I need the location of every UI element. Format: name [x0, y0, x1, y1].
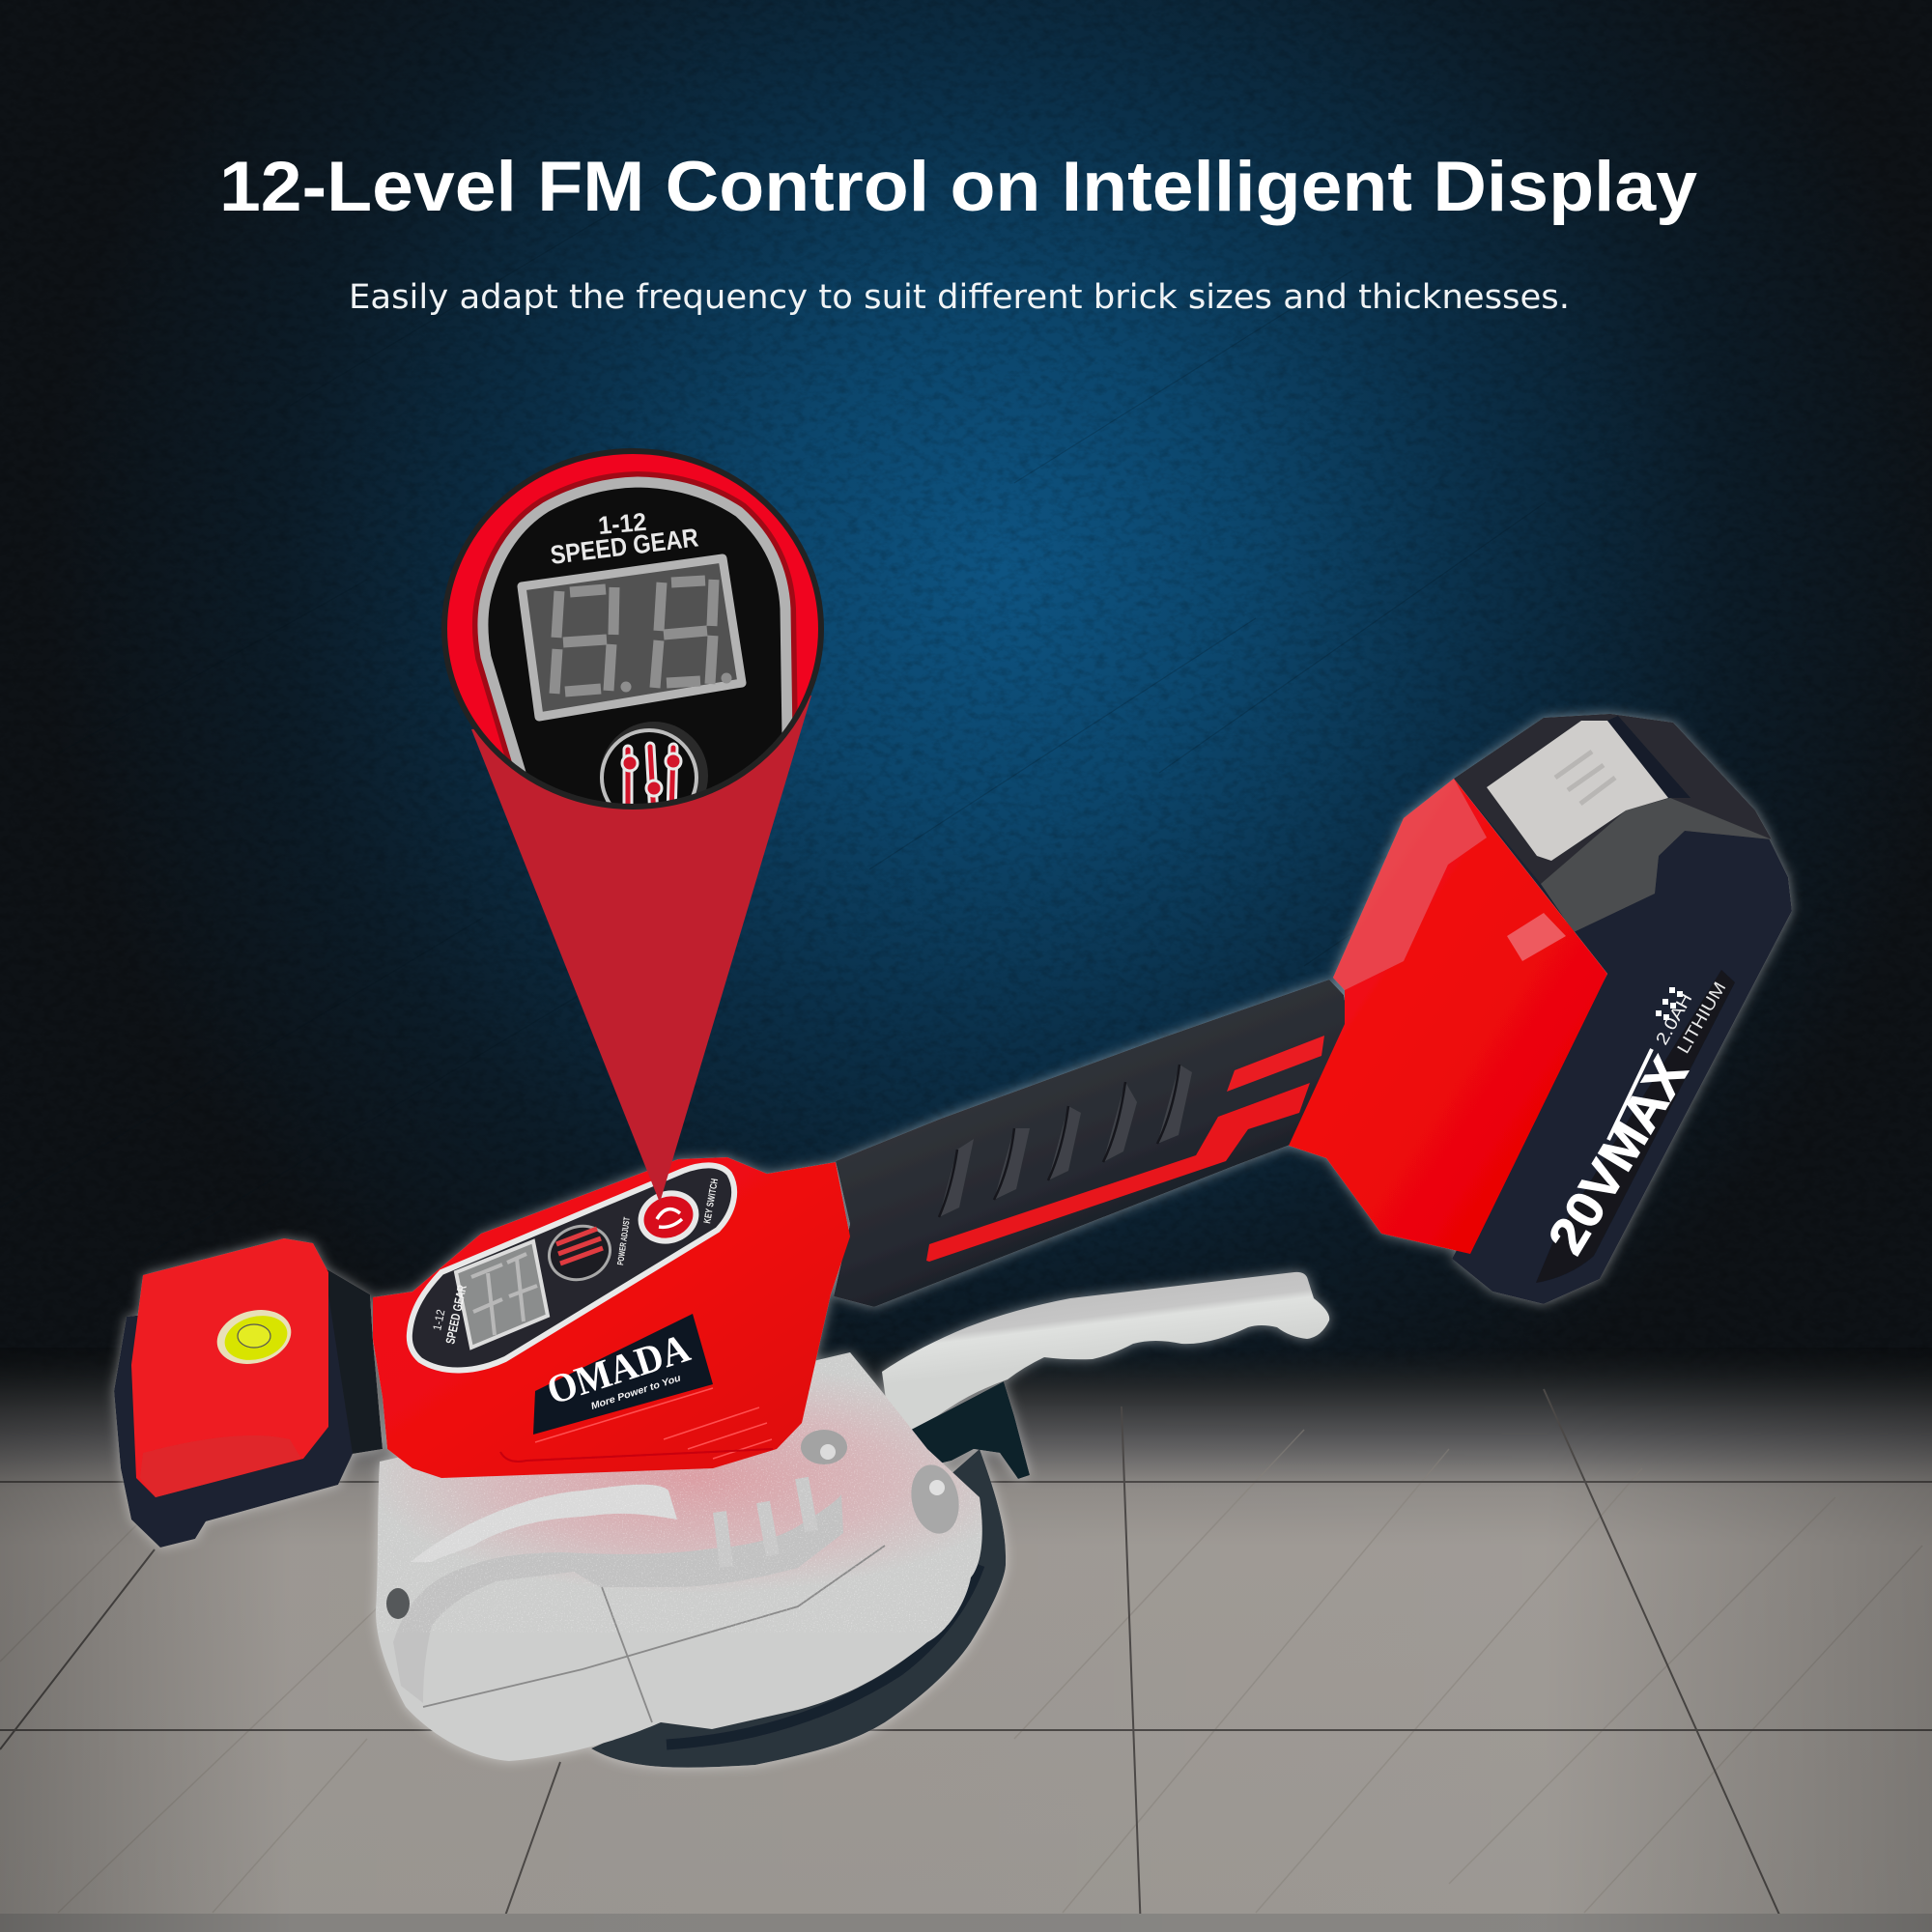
upper ridge [411, 1485, 677, 1562]
20V MAX text: 20VMAX [1538, 1047, 1699, 1264]
grip ridges [939, 1065, 1192, 1217]
lens label 1-12: 1-12 [597, 507, 647, 540]
handle grip [834, 980, 1350, 1307]
mounting screw [801, 1430, 847, 1464]
slider button icon [600, 722, 708, 804]
red strip upper [1227, 1036, 1324, 1092]
display digits [522, 558, 742, 717]
product: tile vibration tool [114, 714, 1792, 1768]
capacity bar [1608, 1049, 1652, 1140]
brand name: OMADA [542, 1326, 696, 1414]
panel label speed gear: SPEED GEAR [442, 1283, 469, 1346]
housing relief lines [535, 1388, 772, 1459]
head shoulder housing [373, 1157, 850, 1478]
panel label key switch: KEY SWITCH [702, 1178, 721, 1225]
subtitle: Easily adapt the frequency to suit different brick sizes and thicknesses. [349, 278, 1570, 317]
brand slogan: More Power to You [590, 1373, 682, 1412]
background: tiled floor [0, 1348, 1932, 1932]
battery pack [1452, 714, 1792, 1304]
small digital display [456, 1241, 548, 1348]
callout pointer [471, 696, 811, 1203]
metallic speckle [367, 1343, 995, 1633]
panel label 1-12: 1-12 [430, 1308, 448, 1332]
rubber neck [326, 1268, 383, 1459]
red strip lower with long tail [926, 1083, 1310, 1262]
capacity dots [1656, 987, 1683, 1020]
trigger lever [882, 1272, 1329, 1438]
panel label power adjust: POWER ADJUST [615, 1216, 632, 1265]
2.0AH text: 2.0AH [1652, 990, 1696, 1048]
battery top plate [1454, 714, 1772, 932]
silver base housing [367, 1343, 995, 1768]
lithium text: LITHIUM [1673, 979, 1729, 1057]
bubble level [211, 1302, 298, 1372]
title: 12-Level FM Control on Intelligent Display [219, 148, 1697, 226]
level block [114, 1238, 353, 1548]
red battery mount [1289, 779, 1607, 1254]
lens label speed gear: SPEED GEAR [549, 523, 700, 570]
pivot screw [905, 1461, 965, 1538]
pink reflection from red housing [421, 1390, 976, 1567]
small slider button [542, 1218, 617, 1288]
battery release button [1487, 721, 1668, 861]
zoom callout lens [442, 449, 823, 830]
control panel on tool [410, 1165, 734, 1370]
dark slot [1607, 716, 1690, 798]
black clamp [895, 1381, 1030, 1479]
side screw [386, 1588, 410, 1619]
speckled shoulder [1541, 798, 1772, 932]
control panel outline [483, 482, 788, 802]
brand badge [533, 1314, 713, 1435]
housing seams [423, 1546, 885, 1722]
small power button [631, 1182, 706, 1252]
battery label [1536, 970, 1735, 1283]
lower ridge band [393, 1494, 843, 1703]
dark suction ring [591, 1449, 1006, 1768]
